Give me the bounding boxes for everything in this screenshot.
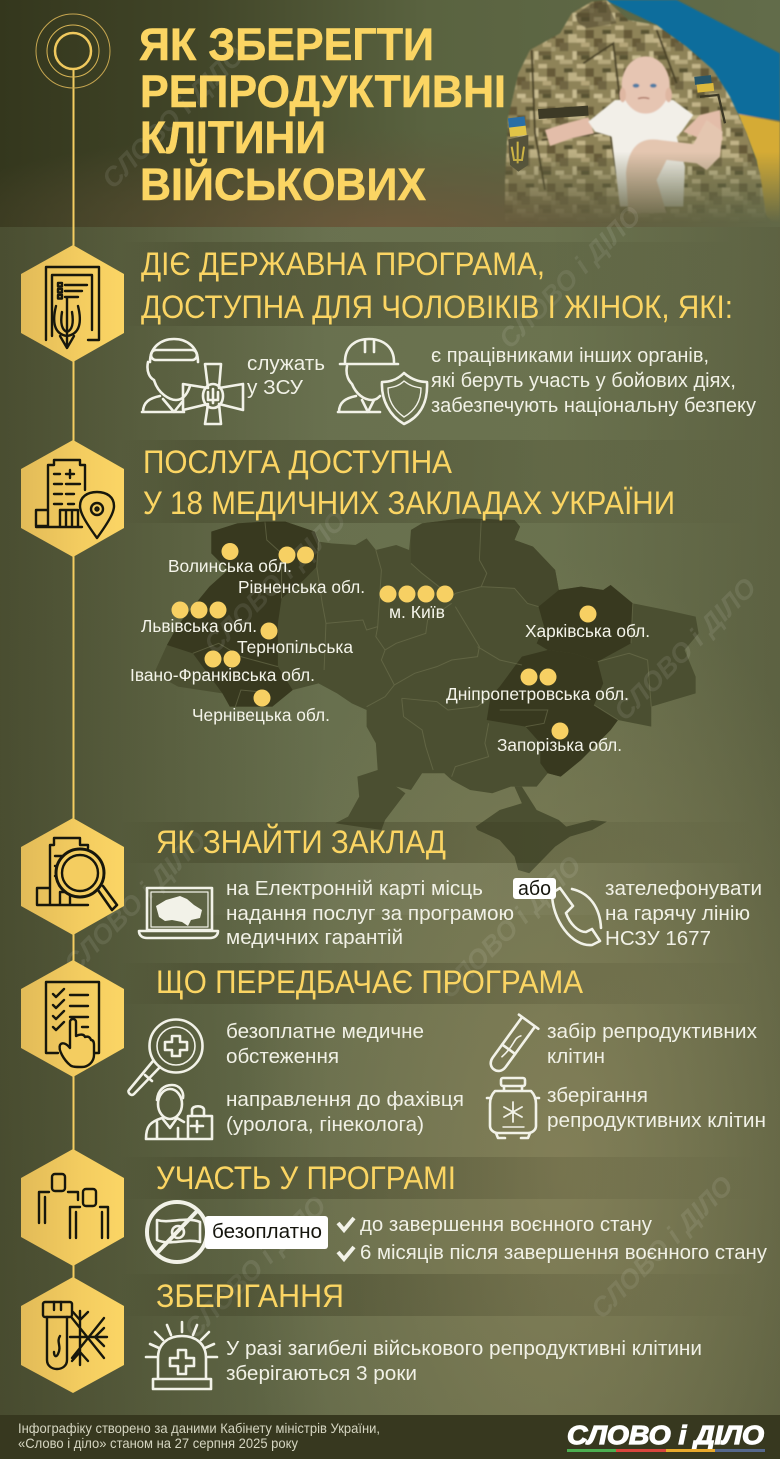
map labels: Дніпропетровська обл.	[446, 684, 629, 704]
flag	[605, 0, 780, 230]
map: Crimea	[476, 787, 607, 873]
map labels: Тернопільська	[237, 637, 353, 657]
icon: checklist with hand	[46, 982, 99, 1067]
icon: doctor with medical case	[146, 1085, 212, 1139]
map labels: м. Київ	[389, 602, 445, 622]
text: other agencies: які беруть участь у бойових діях,	[431, 369, 736, 392]
text: serve in the Armed Forces: служать	[247, 352, 325, 375]
map labels: Харківська обл.	[525, 621, 650, 641]
text: referral to a specialist	[226, 1088, 464, 1136]
text: storing cells: зберігання	[547, 1084, 648, 1107]
label: free of charge	[205, 1216, 328, 1249]
heading: 18 medical facilities: ПОСЛУГА ДОСТУПНА	[143, 444, 453, 480]
hexagon: hospital icon	[21, 440, 124, 557]
timeline line with target rings	[36, 14, 110, 1280]
decorative watermarks: СЛОВО і ДІЛО	[585, 1170, 739, 1324]
uniform jacket	[505, 0, 768, 230]
map dots	[172, 543, 596, 740]
map: western highlighted regions	[167, 522, 319, 707]
source note: «Слово і діло» станом на 27 серпня 2025 року	[18, 1435, 298, 1451]
text: other agencies: забезпечують національну безпеку	[431, 394, 757, 417]
title: РЕПРОДУКТИВНІ	[140, 66, 506, 117]
map labels: Львівська обл.	[141, 616, 257, 636]
decorative watermarks: СЛОВО і ДІЛО	[178, 1190, 332, 1344]
map labels: Рівненська обл.	[238, 577, 365, 597]
heading bands	[120, 242, 760, 1316]
left chest patches	[508, 106, 589, 172]
decorative watermarks: СЛОВО і ДІЛО	[433, 850, 587, 1004]
heading: storage: ЗБЕРІГАННЯ	[156, 1278, 344, 1314]
text: free examination	[226, 1020, 424, 1068]
heading: state programme: ДОСТУПНА ДЛЯ ЧОЛОВІКІВ І ЖІНОК, ЯКІ:	[141, 289, 733, 325]
decorative watermarks: СЛОВО і ДІЛО	[96, 40, 250, 194]
hexagon: checklist icon	[21, 960, 124, 1077]
heading: state programme	[141, 246, 733, 325]
icon: worker with shield	[338, 339, 427, 424]
icon: test tube	[484, 1015, 538, 1077]
baby bodysuit	[588, 100, 693, 207]
map: Kharkiv region	[537, 585, 633, 662]
text: storing cells: репродуктивних клітин	[547, 1109, 766, 1132]
map: Dnipropetrovsk and Zaporizhzhia regions	[487, 650, 618, 777]
text: hotline: НСЗУ 1677	[605, 927, 711, 950]
map base outline	[154, 518, 699, 830]
heading: state programme: ДІЄ ДЕРЖАВНА ПРОГРАМА,	[141, 246, 545, 282]
icon: telephone handset	[552, 888, 601, 945]
title: КЛІТИНИ	[140, 112, 326, 163]
list: duration: 6 місяців після завершення воєнного стану	[360, 1241, 768, 1264]
header photo: uniform, baby and flag	[505, 0, 780, 230]
icon: soldier with cross	[142, 339, 243, 424]
text: storing cells	[547, 1084, 766, 1132]
icon: check 1	[338, 1218, 354, 1230]
section: participation	[21, 1149, 768, 1266]
shoulder patch	[694, 75, 725, 123]
title	[139, 19, 506, 210]
label: free of charge: безоплатно	[212, 1221, 322, 1243]
icon: document with trident	[46, 267, 99, 348]
text: storage after death: У разі загибелі військового репродуктивні клітини	[226, 1337, 702, 1360]
map labels: Чернівецька обл.	[192, 705, 330, 725]
text: hotline: на гарячу лінію	[605, 902, 750, 925]
text: serve in the Armed Forces	[247, 352, 325, 399]
source note: Інфографіку створено за даними Кабінету міністрів України,	[18, 1420, 380, 1436]
source note	[18, 1420, 380, 1451]
list: duration: до завершення воєнного стану	[360, 1213, 653, 1236]
baby arms	[545, 117, 594, 146]
icon: cryogenic container	[487, 1078, 539, 1138]
text: referral to a specialist: направлення до фахівця	[226, 1088, 464, 1111]
hexagon: tube and snowflake icon	[21, 1277, 124, 1393]
map labels: Івано-Франківська обл.	[130, 665, 315, 685]
logo: СЛОВО і ДІЛО	[567, 1420, 764, 1450]
baby legs	[626, 120, 723, 213]
hexagon: search icon	[21, 818, 124, 935]
header panel background	[0, 0, 780, 227]
text: free examination: обстеження	[226, 1045, 339, 1068]
text: storage after death: зберігаються 3 роки	[226, 1362, 417, 1385]
title: ЯК ЗБЕРЕГТИ	[139, 19, 434, 70]
text: hotline: зателефонувати	[605, 877, 762, 900]
text: hotline	[605, 877, 762, 950]
footer	[0, 1415, 780, 1459]
text: storage after death	[226, 1337, 702, 1385]
icon: hospital with location pin	[36, 460, 114, 538]
text: free examination: безоплатне медичне	[226, 1020, 424, 1043]
icon: crossed-out money	[147, 1202, 207, 1262]
hexagon: people icon	[21, 1149, 124, 1266]
section: how to find a facility	[21, 818, 762, 950]
text: electronic map: надання послуг за програмою	[226, 902, 514, 925]
heading: what the programme includes: ЩО ПЕРЕДБАЧАЄ ПРОГРАМА	[156, 964, 584, 1000]
baby head	[622, 56, 670, 114]
map: northern regions	[411, 518, 559, 607]
section: storage	[21, 1277, 702, 1393]
map labels	[130, 556, 650, 755]
heading: 18 medical facilities	[143, 444, 675, 521]
heading: how to find a facility: ЯК ЗНАЙТИ ЗАКЛАД	[156, 824, 446, 860]
decorative watermarks: СЛОВО і ДІЛО	[198, 505, 352, 659]
text: collecting cells	[547, 1020, 758, 1068]
section: 18 medical facilities	[21, 440, 675, 755]
heading: participation: УЧАСТЬ У ПРОГРАМІ	[156, 1160, 456, 1196]
title: ВІЙСЬКОВИХ	[140, 159, 426, 210]
text: referral to a specialist: (уролога, гінеколога)	[226, 1113, 424, 1136]
baby	[545, 56, 723, 213]
map labels: Запорізька обл.	[497, 735, 622, 755]
map labels: Волинська обл.	[168, 556, 292, 576]
icon: two people	[39, 1174, 108, 1238]
label: or: або	[518, 878, 551, 900]
icon: laptop with Ukraine map	[139, 888, 218, 938]
section: state programme	[21, 245, 757, 424]
section: what the programme includes	[21, 960, 766, 1139]
text: other agencies	[431, 344, 757, 417]
map: region borders	[193, 520, 651, 777]
icon: test tube with snowflake	[43, 1302, 107, 1369]
heading: 18 medical facilities: У 18 МЕДИЧНИХ ЗАКЛАДАХ УКРАЇНИ	[143, 485, 675, 521]
decorative watermarks: СЛОВО і ДІЛО	[493, 200, 647, 354]
text: other agencies: є працівниками інших органів,	[431, 344, 709, 367]
icon: memorial with rays	[146, 1322, 217, 1389]
text: serve in the Armed Forces: у ЗСУ	[247, 376, 304, 399]
text: collecting cells: клітин	[547, 1045, 605, 1068]
panel: map of Ukraine	[154, 518, 699, 873]
decorative watermarks: СЛОВО і ДІЛО	[608, 572, 762, 726]
icon: check 2	[338, 1247, 354, 1259]
icon: magnifier with plus	[128, 1020, 202, 1095]
text: electronic map: медичних гарантій	[226, 926, 403, 949]
text: collecting cells: забір репродуктивних	[547, 1020, 758, 1043]
text: electronic map	[226, 877, 514, 949]
hexagon: document icon	[21, 245, 124, 362]
icon: building with magnifier	[37, 838, 117, 910]
list: duration	[338, 1213, 768, 1264]
text: electronic map: на Електронній карті місць	[226, 877, 483, 900]
decorative watermarks: СЛОВО і ДІЛО	[58, 825, 212, 979]
